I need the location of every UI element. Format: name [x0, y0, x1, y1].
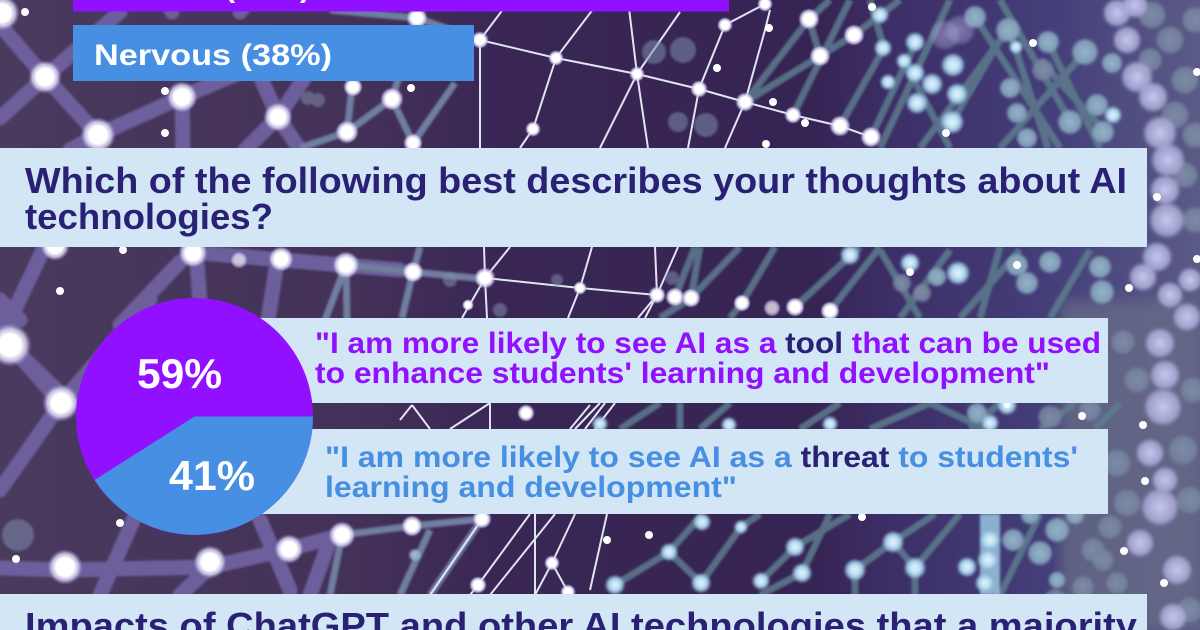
bar: Nervous 38% — [73, 25, 474, 81]
heading panel: question: technologies? — [25, 196, 273, 237]
bar: Nervous 38%: Nervous (38%) — [94, 39, 332, 72]
panel: threat statement — [225, 429, 1108, 514]
panel: threat statement: "I am more likely to see AI as a threat to students' — [325, 441, 1078, 474]
panel: tool statement: "I am more likely to see AI as a tool that can be used — [315, 327, 1101, 360]
faint steel lines — [615, 0, 1120, 595]
panel: threat statement: learning and development" — [325, 471, 737, 504]
panel: tool statement — [225, 318, 1108, 403]
pie chart: 59% tool, 41% threat: 41% — [169, 452, 255, 499]
pie chart: 59% tool, 41% threat — [76, 298, 313, 535]
dim halos — [2, 37, 718, 560]
panel: tool statement: to enhance students' learning and development" — [315, 357, 1050, 390]
thick lavender lines left — [0, 0, 400, 595]
heading panel: question — [0, 148, 1147, 247]
grey haze on the right edge — [1060, 300, 1200, 630]
heading panel: impacts (cropped at the bottom edge) — [0, 594, 1147, 630]
pie chart: 59% tool, 41% threat: 59% — [137, 350, 222, 397]
glowing nodes — [0, 0, 882, 600]
blurry right side — [409, 0, 1200, 630]
heading panel: question: Which of the following best describes your thoughts about AI — [25, 160, 1127, 201]
thin white lines centre — [400, 0, 871, 595]
bar: top response (cropped at the top edge) — [73, 0, 729, 12]
